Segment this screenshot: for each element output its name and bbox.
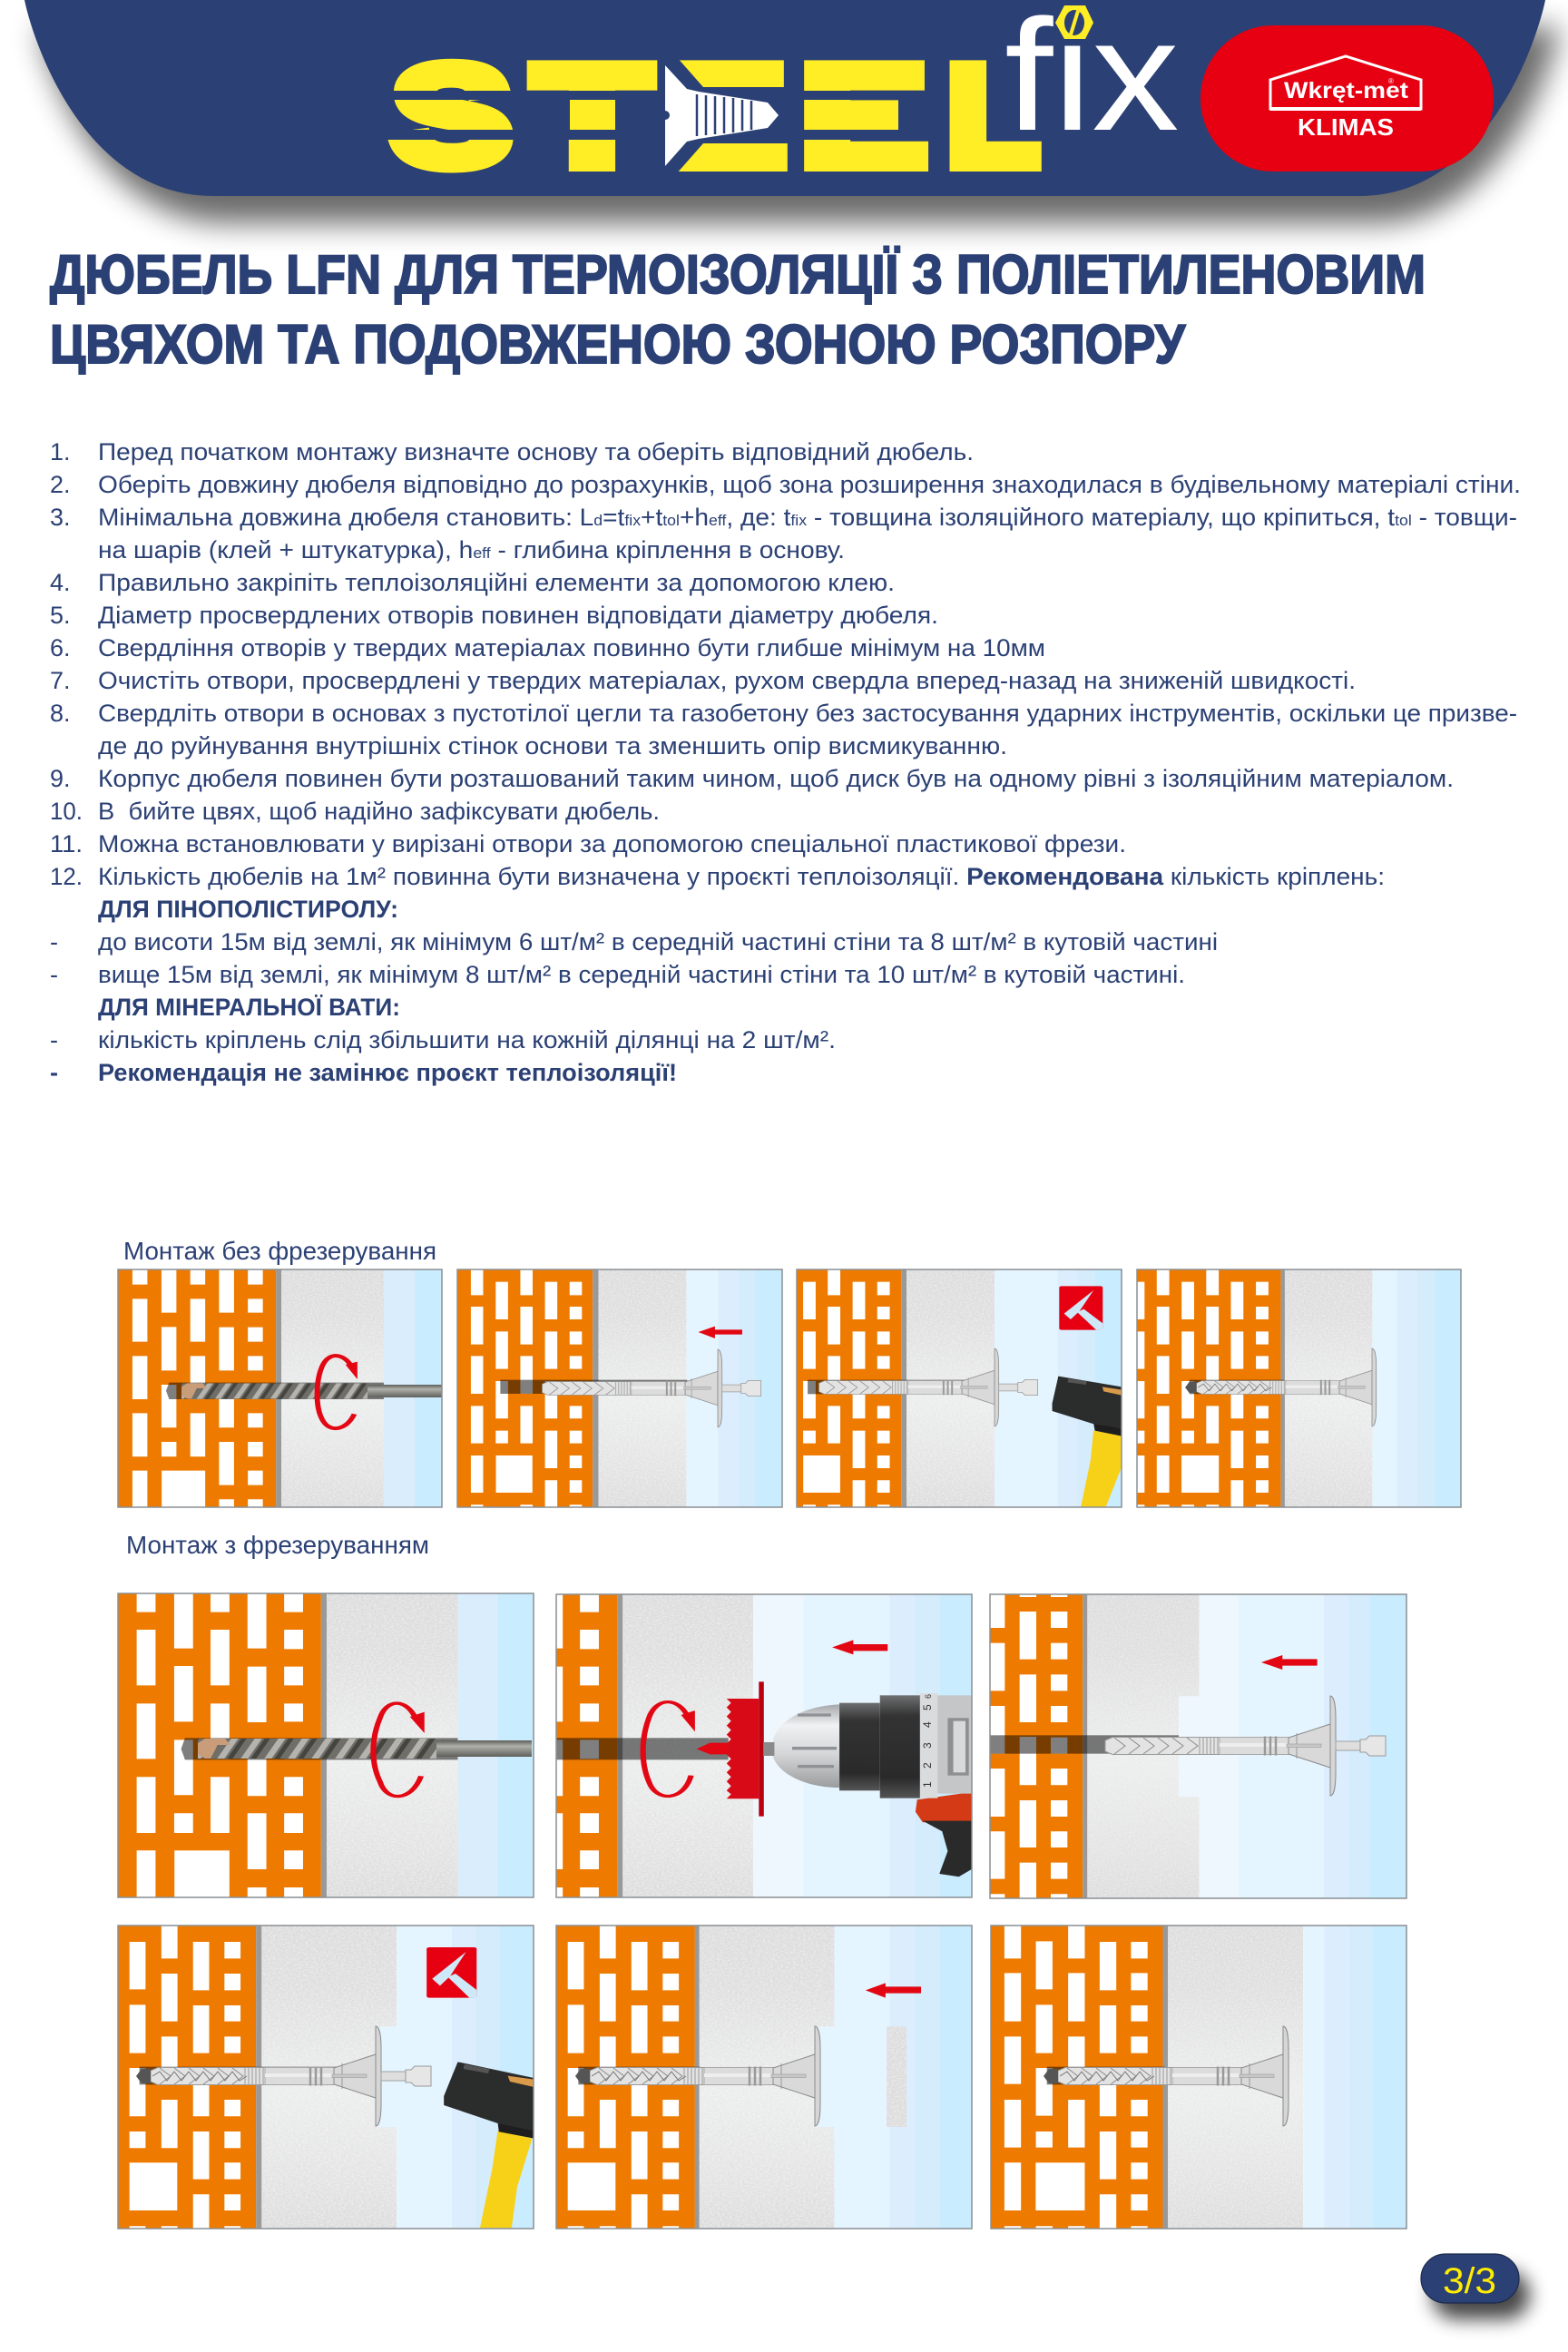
instructions text block: де до руйнування внутрішніх стінок основи та зменшить опір висмикуванню.: [98, 732, 1007, 760]
instructions text block: Свердління отворів у твердих матеріалах повинно бути глибше мінімум на 10мм: [98, 634, 1045, 662]
title: ДЮБЕЛЬ LFN ДЛЯ ТЕРМОІЗОЛЯЦІЇ З ПОЛІЕТИЛЕНОВИМ: [50, 244, 1426, 305]
brand badge: [1200, 25, 1494, 172]
panel: row 3 step 6 finished: [991, 1926, 1406, 2229]
insulation plug: [887, 2026, 906, 2127]
instructions text block: 1.: [50, 438, 71, 466]
drill bit: [181, 1383, 442, 1399]
instructions text block: 7.: [50, 667, 71, 694]
instructions text block: Оберіть довжину дюбеля відповідно до розрахунків, щоб зона розширення знаходилася в будівельному матеріалі стіни.: [98, 471, 1521, 498]
arrow: [698, 1327, 742, 1338]
banner shape: [24, 0, 1545, 196]
arrow: [866, 1983, 921, 1998]
instructions text block: Кількість дюбелів на 1м² повинна бути визначена у проєкті теплоізоляції. Рекомендована кількість кріплень:: [98, 863, 1385, 890]
header banner: [24, 0, 1560, 223]
drill speed numbers: 2: [921, 1762, 934, 1769]
instructions text block: Мінімальна довжина дюбеля становить: L d=tfix+ttol+heff, де: tfix - товщина ізоляційного матеріалу, що кріпиться, t tol - товщи-: [98, 504, 1517, 531]
brand badge: KLIMAS: [1298, 113, 1394, 141]
panel: row 1 step 2 insert dowel: [457, 1269, 782, 1507]
panel: row 1 step 3 hammering: [797, 1269, 1122, 1507]
title: [50, 244, 1426, 375]
instructions text block: Можна встановлювати у вирізані отвори за допомогою спеціальної пластикової фрези.: [98, 830, 1126, 858]
rotation arrow: [643, 1702, 695, 1796]
heading: mounting without milling: Монтаж без фрезерування: [123, 1237, 436, 1265]
heading: mounting with milling: Монтаж з фрезеруванням: [126, 1531, 429, 1559]
logo: steel word: E: [665, 37, 785, 194]
milling cutter: [697, 1681, 771, 1817]
panel: row 1 step 4 installed: [1137, 1269, 1461, 1507]
instructions text block: на шарів (клей + штукатурка), h eff - глибина кріплення в основу.: [98, 536, 845, 564]
instructions text block: -: [50, 1059, 58, 1086]
drill speed numbers: [921, 1694, 934, 1788]
instructions text block: 12.: [50, 863, 83, 890]
arrow: [832, 1640, 887, 1654]
page number badge: 3/3: [1443, 2261, 1496, 2301]
instructions text block: 2.: [50, 471, 71, 498]
drill speed numbers: 3: [921, 1742, 934, 1749]
instructions text block: -: [50, 961, 58, 988]
instructions text block: В бийте цвях, щоб надійно зафіксувати дюбель.: [98, 798, 660, 825]
brand badge: Wkręt-met: [1284, 78, 1409, 103]
dowel: [543, 1349, 761, 1427]
instructions text block: -: [50, 1026, 58, 1054]
drill machine: [763, 1693, 972, 1877]
rotation arrow: [373, 1703, 425, 1797]
drill speed numbers: 1: [921, 1781, 934, 1788]
instructions text block: Свердліть отвори в основах з пустотілої цегли та газобетону без застосування ударних інструментів, оскільки це призве-: [98, 700, 1517, 727]
instructions text block: Корпус дюбеля повинен бути розташований таким чином, щоб диск був на одному рівні з ізоляційним матеріалом.: [98, 765, 1454, 792]
instructions text block: ДЛЯ ПІНОПОЛІСТИРОЛУ:: [98, 896, 398, 923]
drill speed numbers: 4: [921, 1721, 934, 1728]
arrow: [1261, 1655, 1318, 1670]
instructions text block: ДЛЯ МІНЕРАЛЬНОЇ ВАТИ:: [98, 994, 400, 1021]
instructions text block: 10.: [50, 798, 83, 825]
instructions text block: Діаметр просвердлених отворів повинен відповідати діаметру дюбеля.: [98, 602, 938, 629]
instructions text block: [50, 438, 1521, 1086]
dowel: [575, 2026, 820, 2126]
instructions text block: 6.: [50, 634, 71, 662]
instructions text block: до висоти 15м від землі, як мінімум 6 шт/м² в середній частині стіни та 8 шт/м² в кутовій частині: [98, 928, 1218, 956]
logo: steel word: L: [947, 36, 1038, 194]
drill bit: [198, 1739, 532, 1759]
instructions text block: Рекомендація не замінює проєкт теплоізоляції!: [98, 1059, 677, 1086]
instructions text block: 4.: [50, 569, 71, 596]
hammer: [1053, 1377, 1122, 1507]
icon: nut: [1055, 5, 1093, 39]
panel: row 2 step 3 insert dowel: [990, 1594, 1406, 1898]
instructions text block: 8.: [50, 700, 71, 727]
instructions text block: Очистіть отвори, просвердлені у твердих матеріалах, рухом свердла вперед-назад на зниженій швидкості.: [98, 667, 1356, 694]
panel: row 1 step 1 drilling: [118, 1269, 442, 1507]
panel: row 2 step 2 milling: [556, 1594, 972, 1897]
instructions text block: кількість кріплень слід збільшити на кожній ділянці на 2 шт/м².: [98, 1026, 836, 1054]
dowel: [819, 1348, 1038, 1426]
instructions text block: 9.: [50, 765, 71, 792]
dowel: [1185, 1348, 1377, 1426]
panel: row 3 step 4 hammering: [118, 1926, 534, 2229]
dowel: [1105, 1696, 1386, 1796]
icon: hammer sign: [1059, 1286, 1102, 1330]
icon: screw in logo: [658, 56, 799, 174]
instructions text block: -: [50, 928, 58, 956]
logo: steel word: E: [801, 37, 926, 194]
instructions text block: Перед початком монтажу визначте основу та оберіть відповідний дюбель.: [98, 438, 974, 466]
logo: letter slices: [386, 91, 946, 140]
dowel: [1044, 2026, 1289, 2126]
brand badge: ®: [1388, 77, 1394, 85]
instructions text block: 11.: [50, 830, 83, 858]
instructions text block: Правильно закріпіть теплоізоляційні елементи за допомогою клею.: [98, 569, 895, 596]
instructions text block: 3.: [50, 504, 71, 531]
drill speed numbers: 5: [921, 1704, 934, 1710]
logo: steel word: T: [534, 37, 650, 194]
page number badge: [1421, 2254, 1530, 2319]
logo: steel word: [392, 36, 1038, 194]
dowel: [136, 2026, 431, 2126]
instructions text block: вище 15м від землі, як мінімум 8 шт/м² в середній частині стіни та 10 шт/м² в кутовій частині.: [98, 961, 1185, 988]
panel: row 3 step 5 plug: [556, 1926, 972, 2229]
rotation arrow: [318, 1356, 358, 1428]
panel: row 2 step 1 drilling: [118, 1593, 534, 1897]
icon: hammer sign: [426, 1947, 476, 1998]
drill speed numbers: 6: [924, 1694, 933, 1699]
logo: steel word: S: [392, 37, 511, 194]
instructions text block: 5.: [50, 602, 71, 629]
banner shadow: [39, 27, 1560, 223]
hammer: [444, 2062, 534, 2228]
title: ЦВЯХОМ ТА ПОДОВЖЕНОЮ ЗОНОЮ РОЗПОРУ: [50, 314, 1186, 375]
